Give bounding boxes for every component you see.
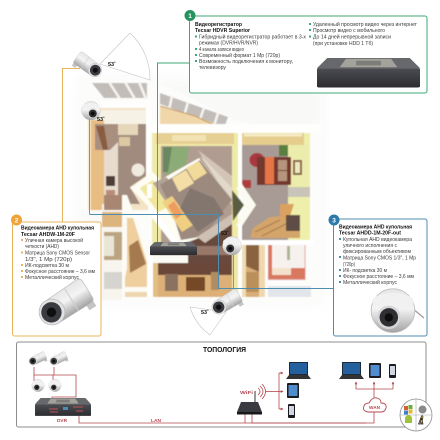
feature list left: режимах (DVR/HVR/NVR) <box>199 41 258 47</box>
lower center floor <box>186 222 232 264</box>
icon: android <box>405 415 412 423</box>
line: recorder to panel 1 <box>158 63 189 244</box>
partition bands <box>152 124 322 133</box>
angle label: 53˚ <box>108 61 116 68</box>
camera: bottom bullet <box>209 288 245 319</box>
soft shadow <box>78 78 323 303</box>
badge 1: 1 <box>188 13 192 20</box>
badge 2: 2 <box>15 217 19 224</box>
icon: windows <box>404 405 412 414</box>
recorder <box>35 398 91 416</box>
right room <box>242 133 310 240</box>
lower left rooms <box>102 204 122 300</box>
camera photo <box>33 278 97 334</box>
fan: top-left camera view <box>100 33 150 80</box>
feature list: ИК-подсветка 30 м <box>25 263 69 269</box>
feature list right: (при установке HDD 1 Тб) <box>313 41 373 47</box>
balcony slats <box>92 83 147 98</box>
house floor plan <box>78 78 323 303</box>
feature list: Уличная камера высокой <box>25 237 83 244</box>
heading: Tecsar HDVR Superior <box>195 28 251 34</box>
line: left dome drop <box>88 118 90 214</box>
recorder: center <box>150 242 197 255</box>
feature list: Фокусное расстояние – 3,6 мм <box>25 269 95 275</box>
feature list: Матрица Sony CMOS Sensor <box>25 250 90 256</box>
feature list: (720р) <box>343 262 355 268</box>
wiring <box>34 367 393 423</box>
feature list right <box>309 21 417 47</box>
router <box>237 391 262 414</box>
feature list: Металлический корпус <box>25 274 79 281</box>
feature list: 1/3", 1 Мр (720р) <box>25 257 72 263</box>
feature list: Металлический корпус <box>343 279 397 286</box>
feature list left: 4 канала записи видео <box>199 47 244 53</box>
camera: center dome <box>223 236 241 255</box>
operating systems <box>400 399 432 431</box>
left room <box>88 108 148 210</box>
feature list left: Возможность подключения к монитору, <box>199 59 293 65</box>
panel: topology <box>16 342 432 431</box>
panel 1: recorder <box>184 10 427 93</box>
feature list <box>339 237 416 286</box>
heading <box>339 224 412 237</box>
feature list <box>21 237 95 281</box>
icon: apple <box>418 406 426 414</box>
camera: top-left bullet <box>71 51 105 82</box>
dome cameras <box>32 379 61 392</box>
bullet cameras <box>27 351 69 368</box>
left devices <box>286 362 311 418</box>
label WIFI: WiFi <box>240 390 253 396</box>
feature list left: Современный формат 1 Мр (720р) <box>199 52 280 59</box>
fan: bottom camera view <box>190 307 226 335</box>
cloud WAN <box>364 398 386 412</box>
feature list: уличного исполнения с <box>343 243 397 249</box>
feature list: Матрица Sony CMOS 1/3", 1 Мр <box>343 255 416 261</box>
cloud WAN: WAN <box>369 405 380 410</box>
angle label: 53˚ <box>201 309 209 316</box>
heading <box>21 226 94 238</box>
right devices <box>339 362 396 379</box>
feature list left <box>195 34 306 71</box>
feature list: четкости (AHD) <box>25 244 59 250</box>
icon: wifi waves <box>258 384 266 399</box>
panel 3: dome camera <box>328 214 427 336</box>
feature list right: До 14 дней непрерывной записи <box>313 34 391 40</box>
feature list right: Просмотр видео с мобильного <box>313 28 385 34</box>
panel 2: bullet camera <box>11 214 101 336</box>
label DVR: DVR <box>57 418 68 424</box>
heading: Видеорегистратор <box>195 22 243 28</box>
heading <box>195 22 251 34</box>
icon: linux <box>418 416 423 424</box>
feature list left: Гибридный видеорегистратор работает в 3-х <box>199 34 306 40</box>
feature list: Купольная AHD видеокамера <box>343 237 412 243</box>
center room <box>152 133 238 297</box>
outer walls <box>78 78 320 302</box>
feature list: ИК- подсветка 30 м <box>343 268 387 274</box>
recorder photo <box>317 58 420 87</box>
rotated sofa block <box>130 158 232 244</box>
camera: left dome <box>82 101 100 120</box>
lower right rooms <box>242 245 265 297</box>
angle label: 53˚ <box>221 230 229 237</box>
angle label: 53˚ <box>97 116 105 123</box>
feature list: Фокусное расстояние – 3,6 мм <box>343 274 414 280</box>
heading: Tecsar AHDD-1M-20F-out <box>339 231 401 237</box>
heading: Tecsar AHDW-1M-20F <box>21 232 76 238</box>
heading: Видеокамера AHD купольная <box>21 226 94 232</box>
feature list: фиксированным объективом <box>343 249 411 255</box>
feature list right: Удаленный просмотр видео через интернет <box>313 21 417 28</box>
feature list left: телевизору <box>199 65 226 71</box>
badge 1 <box>184 10 196 21</box>
line: cameras to panel 3 <box>90 214 333 288</box>
label LAN: LAN <box>151 418 162 424</box>
heading: Видеокамера AHD купольная <box>339 224 412 230</box>
connector lines <box>62 63 333 288</box>
line: center dome drop <box>232 254 234 288</box>
heading: ТОПОЛОГИЯ <box>203 347 246 354</box>
camera photo <box>371 289 424 333</box>
line: bullet camera to panel 2 <box>62 68 80 222</box>
badge 3: 3 <box>332 217 336 224</box>
